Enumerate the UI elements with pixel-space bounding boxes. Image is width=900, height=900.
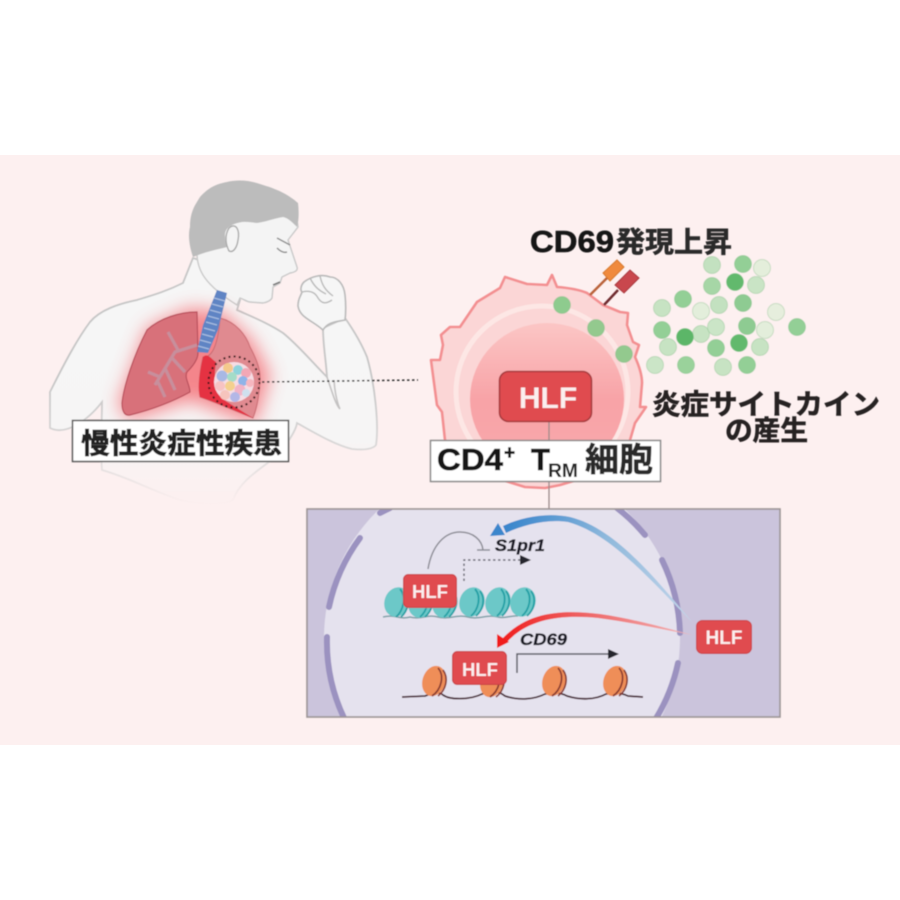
- eye and brow: [277, 238, 290, 252]
- panel: nucleus gene regulation: [306, 508, 782, 718]
- torso and arm: [50, 258, 377, 504]
- panel border: [307, 509, 780, 717]
- mouth: [273, 282, 280, 285]
- label: CD4+ TRM cell: 細胞: [585, 441, 653, 478]
- ear: [226, 226, 239, 251]
- HLF outside the nucleus: HLF: [706, 628, 742, 649]
- trachea: [197, 290, 227, 353]
- label: chronic inflammatory disease: 慢性炎症性疾患: [81, 428, 282, 459]
- HLF outside the nucleus: [696, 620, 752, 654]
- arm crease: [327, 377, 340, 409]
- right lung: [199, 318, 260, 418]
- HLF bound to CD69 locus: HLF: [462, 659, 498, 680]
- magnified cell cluster: [208, 356, 260, 408]
- receptor: CD69 orange and red: [590, 260, 639, 305]
- dotted connector from lung to cell: [262, 380, 418, 382]
- hair: [189, 181, 299, 257]
- inhibition arc to S1pr1: [428, 532, 490, 569]
- HLF protein in the T cell: HLF: [519, 382, 577, 415]
- HLF bound to CD69 locus: [452, 652, 506, 684]
- cell membrane with protrusions: [431, 275, 646, 488]
- background band: [0, 155, 900, 745]
- fist: [298, 276, 346, 330]
- HLF protein in the T cell: [500, 372, 592, 422]
- heart red area: [199, 355, 253, 418]
- heading: inflammatory cytokine production: の産生: [725, 415, 808, 446]
- heading: CD69 upregulation: [530, 224, 732, 259]
- cytoplasm band: [456, 306, 628, 478]
- label: CD4+ TRM cell: T: [531, 442, 550, 477]
- fingers: [302, 276, 333, 303]
- cytokine particles: [554, 256, 806, 376]
- label: chronic inflammatory disease: [72, 420, 288, 462]
- lung glow: [118, 308, 270, 425]
- DNA strand with open orange nucleosomes: [402, 663, 643, 700]
- left lung bronchi: [148, 332, 197, 397]
- label: CD4+ TRM cell: RM: [548, 461, 578, 482]
- nucleus: [470, 323, 624, 475]
- red arrow: activation pathway: [497, 612, 693, 648]
- heading: CD69 upregulation: 発現上昇: [616, 227, 732, 259]
- face and neck: [197, 212, 298, 305]
- trachea rings: [198, 298, 225, 349]
- heading: CD69 upregulation: CD69: [530, 224, 614, 259]
- label: CD4+ TRM cell: +: [504, 443, 515, 464]
- heading: inflammatory cytokine production: 炎症サイトカイン: [652, 389, 880, 420]
- blue arrow: repression pathway: [490, 515, 693, 623]
- illustration: coughing man with inflamed lungs: [50, 181, 377, 504]
- heading: inflammatory cytokine production: [652, 389, 880, 446]
- gene label: CD69: CD69: [520, 630, 568, 649]
- DNA strand with closed teal nucleosomes: [380, 584, 540, 621]
- HLF bound to S1pr1 locus: HLF: [412, 581, 448, 602]
- nuclear membrane dashes: [327, 508, 680, 720]
- HLF bound to S1pr1 locus: [404, 574, 456, 608]
- dotted transcription arrow: [464, 555, 531, 581]
- nucleus interior: [324, 510, 680, 716]
- transcription arrow: [517, 649, 619, 673]
- label: CD4+ TRM cell: CD4: [437, 442, 504, 477]
- left lung: [122, 312, 198, 415]
- connector from HLF to nucleus panel: [548, 422, 550, 510]
- label: CD4+ TRM cell: [430, 440, 660, 482]
- T cell: [431, 275, 646, 488]
- gene label: S1pr1: S1pr1: [495, 536, 545, 555]
